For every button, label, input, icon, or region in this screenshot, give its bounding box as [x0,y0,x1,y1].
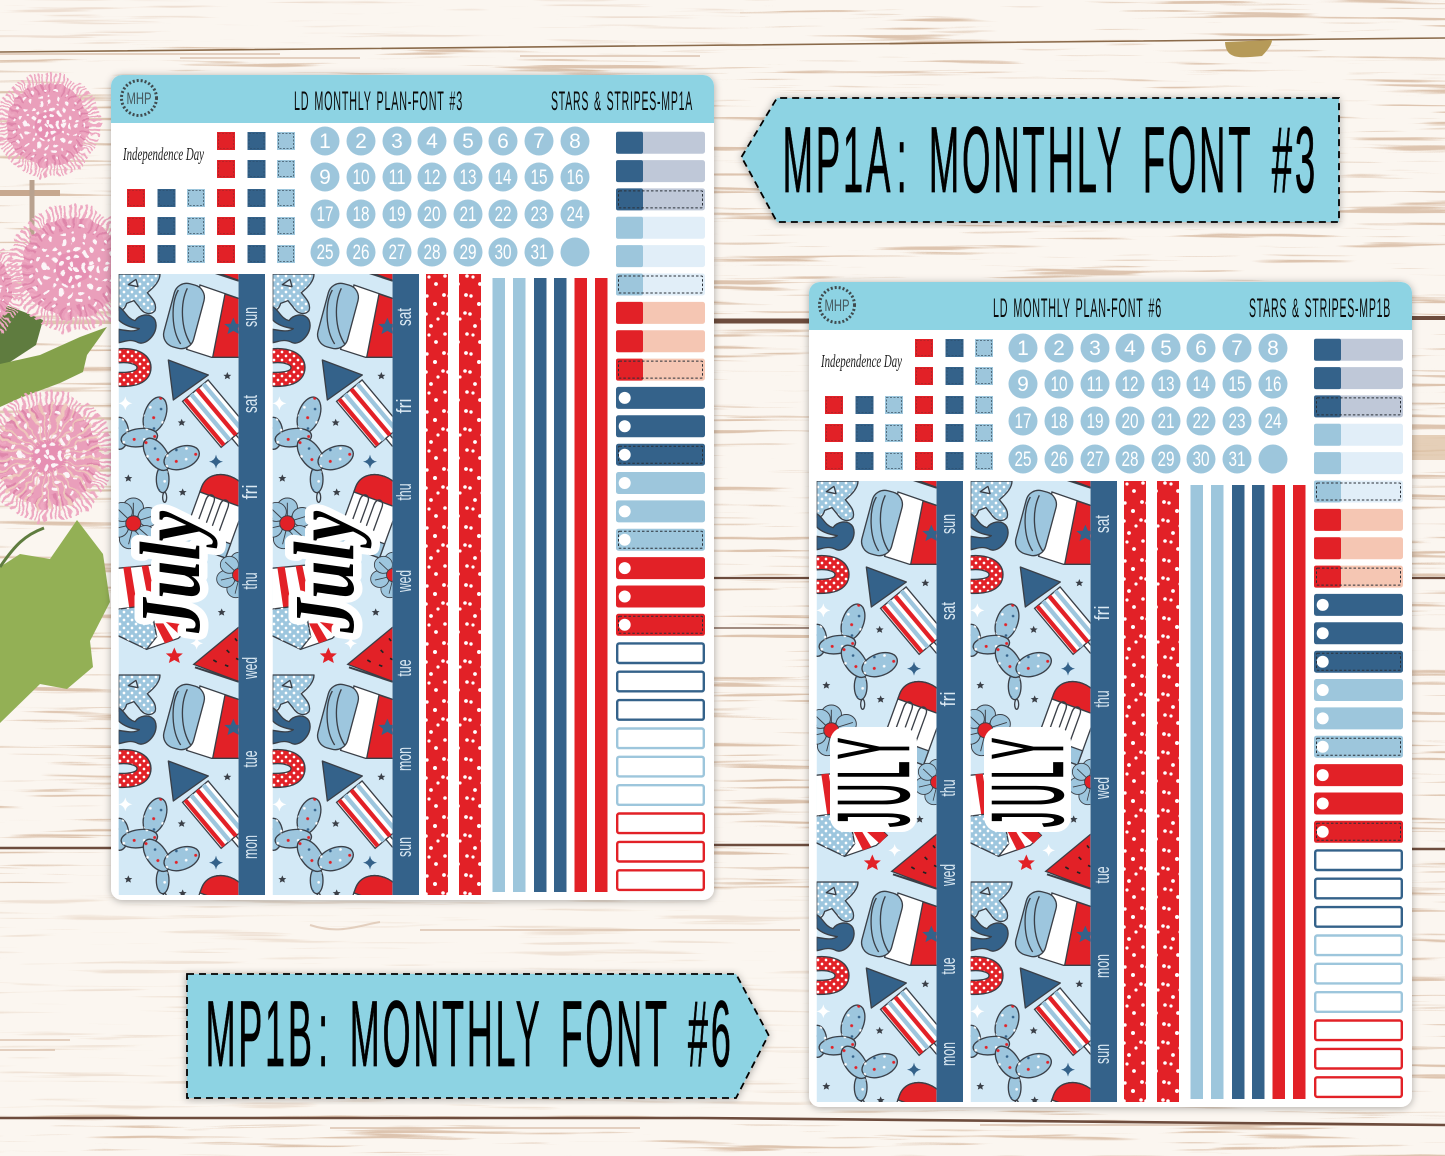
date numbers: 12 [424,166,440,189]
date numbers: 18 [352,203,370,226]
date numbers: 11 [1086,373,1104,396]
illustrated strip 1: wed [240,657,262,680]
text: MP1B: MONTHLY FONT #6 [206,981,734,1086]
illustrated strip 2: wed [394,570,416,593]
JULY block sticker 1 [818,727,930,832]
illustrated strip 2: fri [394,398,416,414]
illustrated strip 1: sat [938,602,960,620]
sticker sheet MP1B [806,282,1412,1124]
illustrated strip 1: fri [240,484,262,500]
illustrated strip 2: mon [394,747,416,771]
illustrated strip 2: mon [1092,954,1114,978]
date numbers: 9 [319,166,331,189]
date numbers: 11 [388,166,406,189]
logo [820,288,854,322]
illustrated strip 2: thu [1092,690,1114,708]
date numbers: 24 [1264,410,1282,433]
date numbers: 22 [1192,410,1210,433]
date numbers: 25 [316,241,334,264]
illustrated strip 2 [960,304,1117,1124]
date numbers: 17 [316,203,334,226]
illustrated strip 2: tue [1092,866,1114,884]
date numbers: 4 [426,130,438,153]
date numbers: 27 [388,241,406,264]
illustrated strip 1: sun [938,514,960,534]
date numbers: 13 [460,166,476,189]
illustrated strip 1: thu [240,572,262,590]
date circles [1008,334,1288,474]
date numbers: 28 [1122,448,1138,471]
star and solid vertical stripes [426,274,608,895]
date numbers: 26 [352,241,370,264]
illustrated strip 1: sun [240,307,262,327]
illustrated strip 2: sun [394,837,416,857]
leaf: upper [0,327,107,407]
date numbers: 21 [460,203,476,226]
date numbers: 28 [424,241,440,264]
illustrated strip 2: sat [394,308,416,326]
banner: MP1B [187,974,768,1098]
date numbers: 5 [462,130,474,153]
date circles [310,126,590,266]
illustrated strip 1: tue [938,958,960,974]
date numbers: 29 [1158,448,1174,471]
date numbers: 30 [494,241,512,264]
illustrated strip 1: fri [938,692,960,706]
date numbers: 13 [1158,373,1174,396]
date numbers: 22 [494,203,512,226]
date numbers: 15 [1228,373,1246,396]
flower: middle [18,214,126,322]
date numbers: 3 [391,130,403,153]
date numbers: 20 [424,203,440,226]
sheet background and header band [111,75,714,900]
date numbers: 29 [460,241,476,264]
date numbers [1014,337,1282,471]
date numbers: 24 [566,203,584,226]
star and solid vertical stripes [1124,481,1306,1102]
stem [30,180,34,242]
illustrated strip 1 [806,304,963,1124]
leaf: lower [0,520,110,723]
date numbers: 17 [1014,410,1032,433]
date numbers: 6 [1195,337,1207,360]
date numbers: 31 [1228,448,1246,471]
date numbers: 18 [1050,410,1068,433]
date numbers: 15 [530,166,548,189]
date numbers: 1 [319,130,331,153]
illustrated strip 2: tue [394,660,416,676]
date numbers: 16 [1264,373,1282,396]
sticker sheet MP1A [108,75,714,917]
date numbers: 5 [1160,337,1172,360]
date numbers: 7 [533,130,545,153]
flower: left partial [0,247,15,333]
date numbers: 26 [1050,448,1068,471]
illustrated strip 2: thu [394,484,416,500]
illustrated strip 1: mon [938,1042,960,1066]
date numbers: 16 [566,166,584,189]
date numbers: 1 [1017,337,1029,360]
stem: lower [0,528,44,567]
sheet background and header band [809,282,1412,1107]
date numbers: 2 [355,130,367,153]
date numbers: 14 [494,166,512,189]
illustrated strip 2: fri [1092,606,1114,620]
date numbers: 14 [1192,373,1210,396]
date numbers: 9 [1017,373,1029,396]
date numbers: 23 [530,203,548,226]
logo [122,80,156,116]
date numbers: 3 [1089,337,1101,360]
sticker sheet MP1B: JULY [818,733,930,827]
script label: Independence Day [820,351,902,371]
sticker sheet MP1B: JULY [972,733,1084,827]
flower: top [4,81,92,169]
date numbers: 10 [352,166,370,189]
date numbers: 30 [1192,448,1210,471]
sticker sheet MP1B: LD MONTHLY PLAN-FONT #6 [993,293,1162,323]
illustrated strip 1: thu [938,780,960,796]
date numbers: 10 [1050,373,1068,396]
text: STARS & STRIPES-MP1A [551,86,693,116]
illustrated strip 1: sat [240,395,262,413]
date numbers: 19 [1086,410,1104,433]
illustrated strip 1: mon [240,835,262,859]
illustrated strip 1: wed [938,864,960,887]
July script sticker 2: July [276,510,372,634]
illustrated strip 2 [262,97,419,917]
date numbers: 23 [1228,410,1246,433]
illustrated strip 1 [108,97,265,917]
illustrated strip 1: tue [240,750,262,768]
decorative flowers and leaves [0,81,126,723]
header tabs [1314,339,1403,1097]
date numbers: 12 [1122,373,1138,396]
small square stickers [127,132,295,263]
flower: lower [0,401,103,511]
July script sticker 1: July [122,510,218,634]
script label: Independence Day [122,144,204,164]
date numbers: 27 [1086,448,1104,471]
date numbers: 19 [388,203,406,226]
illustrated strip 2: sun [1092,1044,1114,1064]
date numbers: 20 [1122,410,1138,433]
date numbers: 21 [1158,410,1174,433]
leaf: dark back [0,303,43,365]
date numbers [316,130,584,264]
date numbers: 7 [1231,337,1243,360]
date numbers: 4 [1124,337,1136,360]
illustrated strip 2: sat [1092,515,1114,533]
date numbers: 8 [1267,337,1279,360]
sticker sheet MP1A: LD MONTHLY PLAN-FONT #3 [294,86,463,116]
illustrated strip 2: wed [1092,777,1114,800]
JULY block sticker 2 [972,727,1084,832]
date numbers: 31 [530,241,548,264]
date numbers: 6 [497,130,509,153]
date numbers: 8 [569,130,581,153]
date numbers: 25 [1014,448,1032,471]
header tabs [616,132,705,890]
banner: MP1A [742,98,1339,222]
date numbers: 2 [1053,337,1065,360]
small square stickers [825,339,993,470]
